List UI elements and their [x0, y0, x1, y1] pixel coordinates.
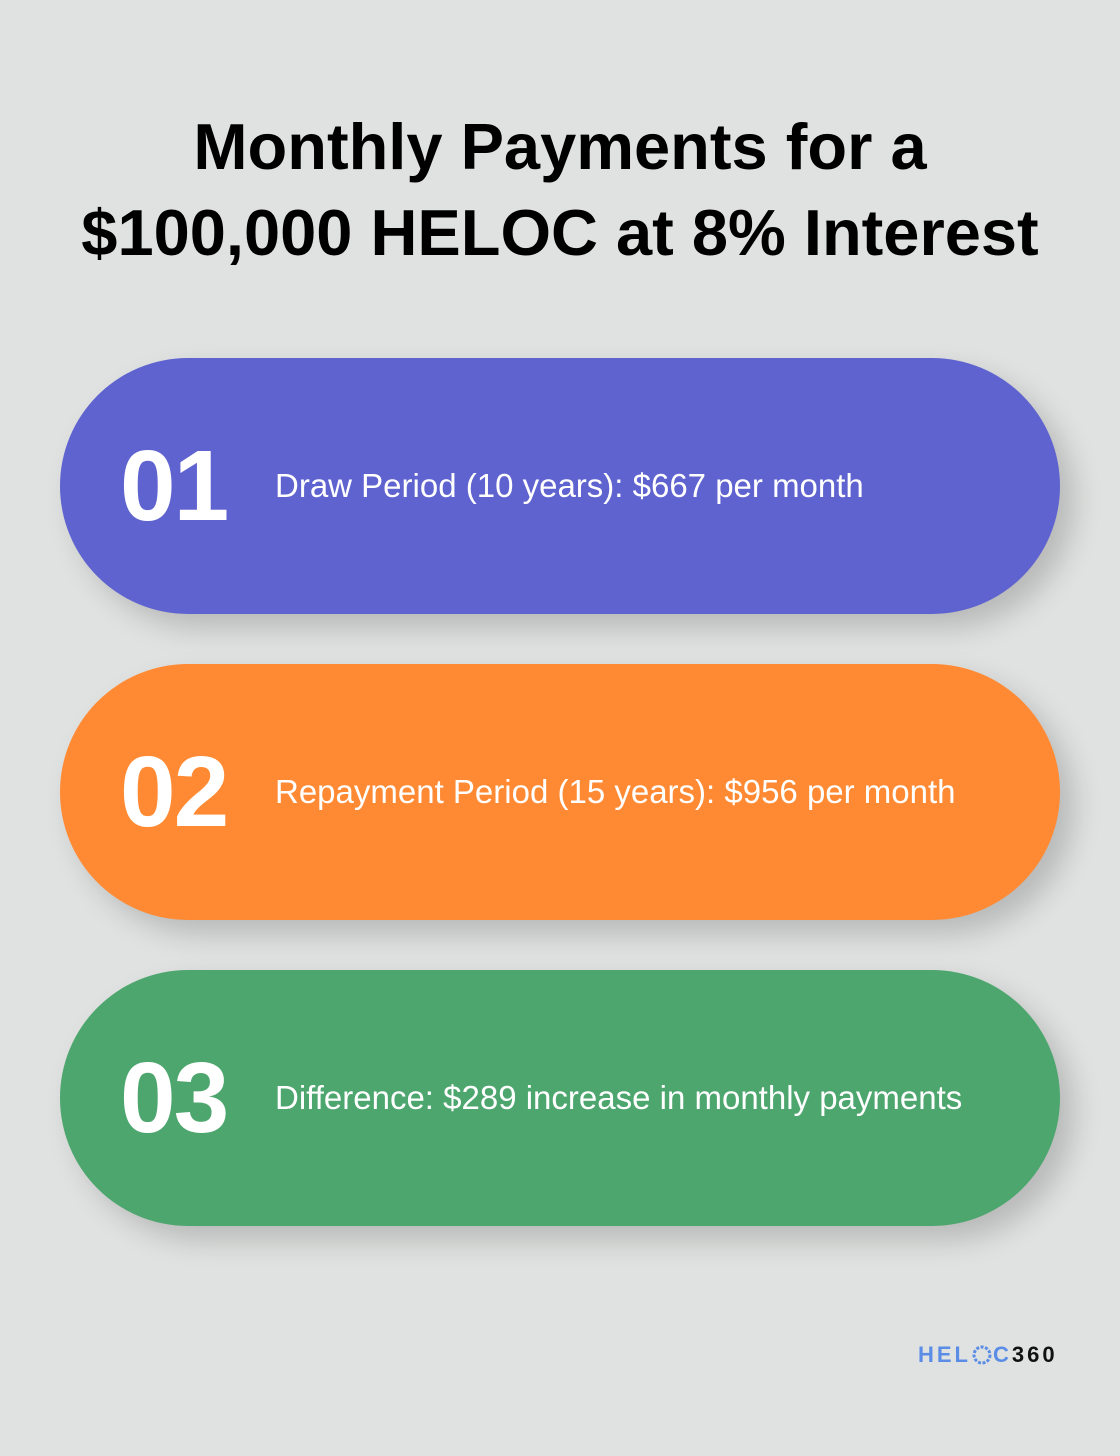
panel: draw period: [60, 358, 1060, 614]
number 01: 01: [120, 430, 227, 542]
logo: 360: [1012, 1342, 1058, 1367]
logo: [918, 1342, 1058, 1367]
logo: HEL: [918, 1342, 971, 1367]
panel: difference: [60, 970, 1060, 1226]
number 02: 02: [120, 736, 227, 848]
text: repayment period: Repayment Period (15 years): $956 per month: [275, 773, 956, 810]
panel: repayment period: [60, 664, 1060, 920]
title: Monthly Payments for a: [193, 110, 927, 183]
title: [81, 110, 1039, 269]
text: draw period: Draw Period (10 years): $667 per month: [275, 467, 864, 504]
logo: C: [993, 1342, 1012, 1367]
title: $100,000 HELOC at 8% Interest: [81, 196, 1039, 269]
number 03: 03: [120, 1042, 227, 1154]
text: difference: Difference: $289 increase in monthly payments: [275, 1079, 962, 1116]
